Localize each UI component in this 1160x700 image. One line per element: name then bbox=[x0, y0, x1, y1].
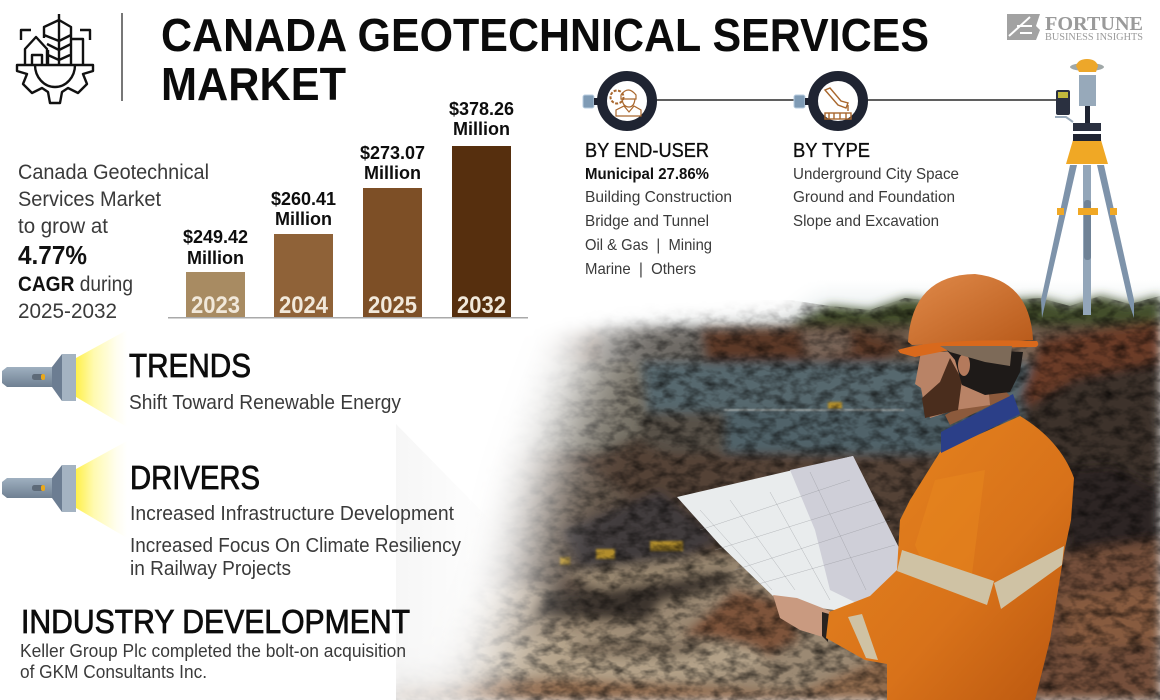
icon: city and gear logo bbox=[17, 14, 93, 103]
drivers text: Increased Focus On Climate Resiliency bbox=[130, 535, 461, 557]
segment list: Underground City Space bbox=[793, 166, 959, 183]
logo: Fortune Business Insights bbox=[1007, 13, 1143, 43]
market summary text: CAGR during bbox=[18, 273, 133, 296]
icon: drilling bbox=[813, 76, 863, 126]
industry development text: Keller Group Plc completed the bolt-on acquisition bbox=[20, 641, 406, 661]
hair bbox=[945, 348, 1023, 395]
bar 2032 bbox=[449, 99, 514, 319]
segment list: Ground and Foundation bbox=[793, 189, 955, 206]
top fade of the quarry wall bbox=[565, 293, 814, 341]
drivers text: Increased Infrastructure Development bbox=[130, 503, 454, 525]
bar 2023: $249.42 bbox=[183, 227, 248, 247]
segment list: Marine | Others bbox=[585, 261, 696, 278]
orange jacket bbox=[826, 416, 1074, 700]
drivers text: in Railway Projects bbox=[130, 558, 291, 580]
segment list bbox=[793, 166, 959, 230]
icon: engineer bbox=[602, 76, 652, 126]
neck bbox=[945, 385, 1010, 425]
industry development text: of GKM Consultants Inc. bbox=[20, 662, 207, 682]
heading: BY END-USER bbox=[585, 140, 709, 162]
connector line bbox=[597, 99, 1060, 101]
white fade mask bbox=[396, 317, 656, 700]
rock texture and darkening bbox=[396, 296, 1160, 700]
segment list: Municipal 27.86% bbox=[585, 166, 709, 183]
segment list: Building Construction bbox=[585, 189, 732, 206]
connector plug bbox=[583, 95, 599, 108]
hard hat bbox=[898, 274, 1038, 366]
title bbox=[161, 9, 929, 110]
bench highlight bbox=[724, 409, 904, 411]
heading: BY TYPE bbox=[793, 140, 870, 162]
wrist band bbox=[822, 612, 829, 642]
icon: surveying tripod bbox=[1041, 59, 1134, 318]
market summary text bbox=[18, 161, 209, 323]
trends flashlight icon bbox=[2, 330, 127, 427]
segment: by type bbox=[793, 76, 959, 230]
drivers heading: DRIVERS bbox=[130, 459, 260, 496]
bar 2025: Million bbox=[364, 163, 421, 183]
worker with site plan bbox=[677, 274, 1074, 700]
header divider bbox=[121, 13, 123, 101]
left white page panel bbox=[0, 0, 396, 700]
title: CANADA GEOTECHNICAL SERVICES bbox=[161, 9, 929, 61]
bar 2024: 2024 bbox=[279, 292, 329, 319]
site plan sheet bbox=[677, 456, 905, 615]
title: MARKET bbox=[161, 58, 346, 110]
collar bbox=[941, 394, 1020, 453]
bar 2032: Million bbox=[453, 119, 510, 139]
face and beard bbox=[915, 352, 990, 418]
bar 2024: Million bbox=[275, 209, 332, 229]
top white band bbox=[396, 0, 1160, 280]
bar 2025: 2025 bbox=[368, 292, 417, 319]
market summary text: Canada Geotechnical bbox=[18, 161, 209, 184]
chart axis bbox=[168, 317, 528, 318]
faded triangle at photo edge bbox=[396, 424, 498, 700]
industry development heading: INDUSTRY DEVELOPMENT bbox=[21, 603, 410, 640]
logo: Fortune Business Insights: FORTUNE bbox=[1045, 13, 1143, 35]
bar 2025: $273.07 bbox=[360, 143, 425, 163]
industry development text bbox=[20, 641, 406, 682]
bar 2024 bbox=[271, 189, 336, 319]
market summary text: Services Market bbox=[18, 188, 161, 211]
reflective stripes bbox=[848, 546, 1064, 660]
pit floor bbox=[452, 556, 880, 696]
trends heading: TRENDS bbox=[129, 347, 251, 384]
trends text: Shift Toward Renewable Energy bbox=[129, 392, 401, 414]
background photo: open-pit mine bbox=[396, 287, 1160, 700]
segment list bbox=[585, 166, 732, 278]
right slope bbox=[1018, 320, 1160, 410]
bar 2032: $378.26 bbox=[449, 99, 514, 119]
drivers text bbox=[130, 503, 461, 580]
bar chart bbox=[168, 99, 528, 319]
bar 2023: Million bbox=[187, 248, 244, 268]
connector plug bbox=[794, 95, 810, 108]
bar 2032: 2032 bbox=[457, 292, 506, 319]
market summary text: to grow at bbox=[18, 215, 108, 238]
hand bbox=[773, 595, 830, 638]
yellow machines bbox=[560, 402, 842, 565]
segment list: Slope and Excavation bbox=[793, 213, 939, 230]
bar 2023: 2023 bbox=[191, 292, 240, 319]
bar 2024: $260.41 bbox=[271, 189, 336, 209]
bar 2025 bbox=[360, 143, 425, 319]
logo: Fortune Business Insights: BUSINESS INSIGHTS bbox=[1045, 32, 1143, 43]
tree line bbox=[790, 296, 1160, 345]
market summary text: 2025-2032 bbox=[18, 300, 117, 323]
segment list: Oil & Gas | Mining bbox=[585, 237, 712, 254]
market summary text: 4.77% bbox=[18, 240, 87, 270]
drivers flashlight icon bbox=[2, 441, 127, 538]
segment list: Bridge and Tunnel bbox=[585, 213, 709, 230]
segment: by end-user bbox=[583, 76, 732, 278]
bar 2023 bbox=[183, 227, 248, 319]
